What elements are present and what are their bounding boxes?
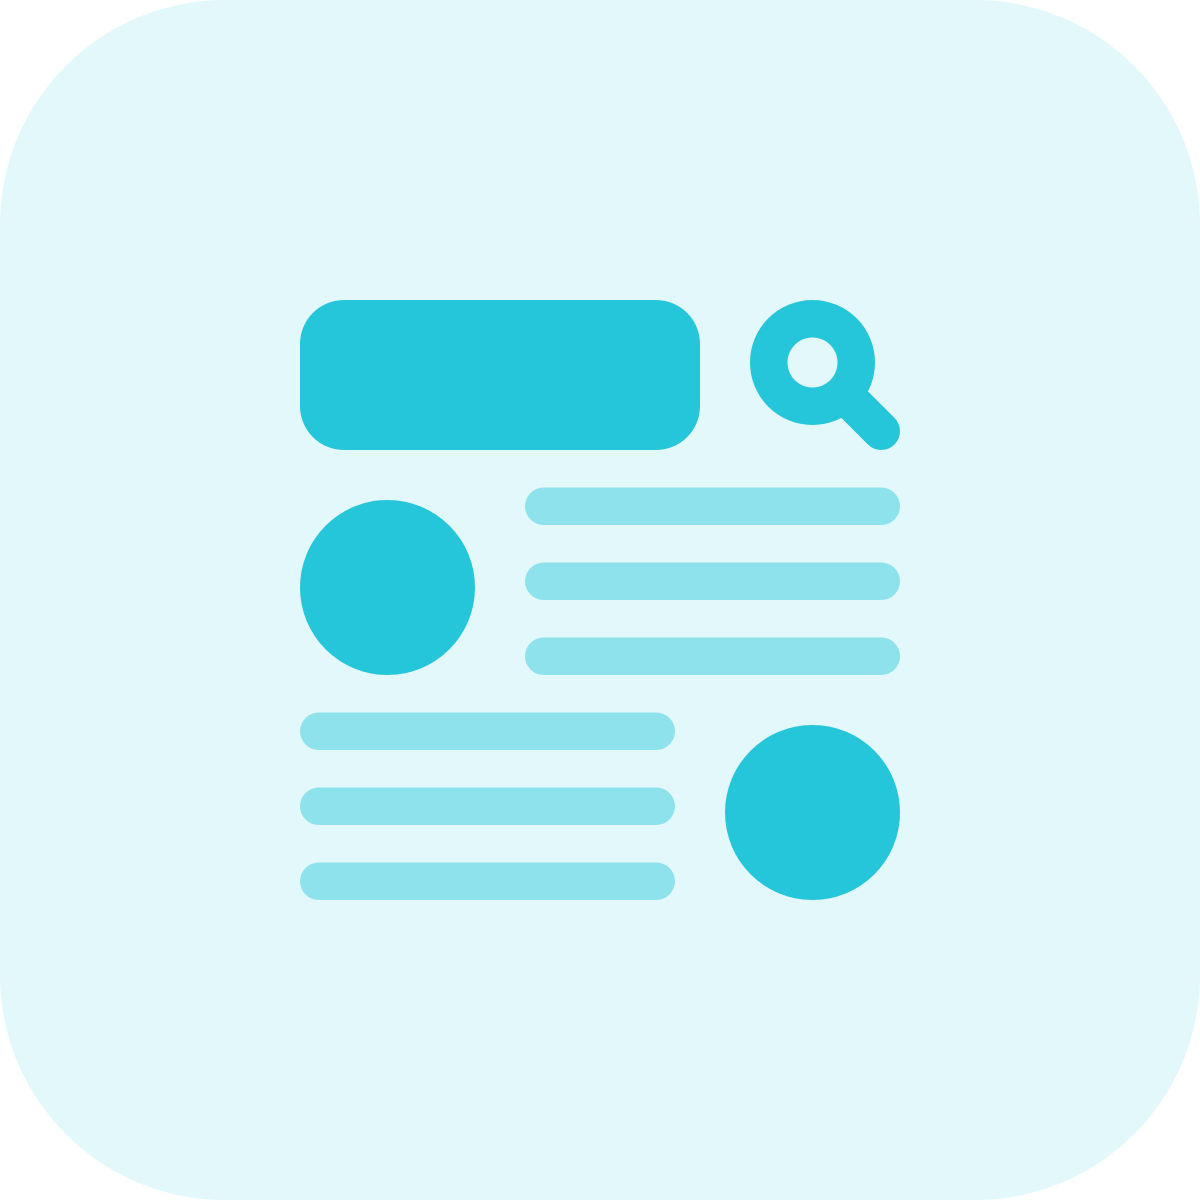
text lines: right column: [525, 488, 900, 675]
image circle: right: [725, 725, 900, 900]
image circle: left: [300, 500, 475, 675]
headline block: [300, 300, 700, 450]
icon: magnifying glass: [750, 300, 881, 431]
text lines: left column: [300, 712, 675, 900]
